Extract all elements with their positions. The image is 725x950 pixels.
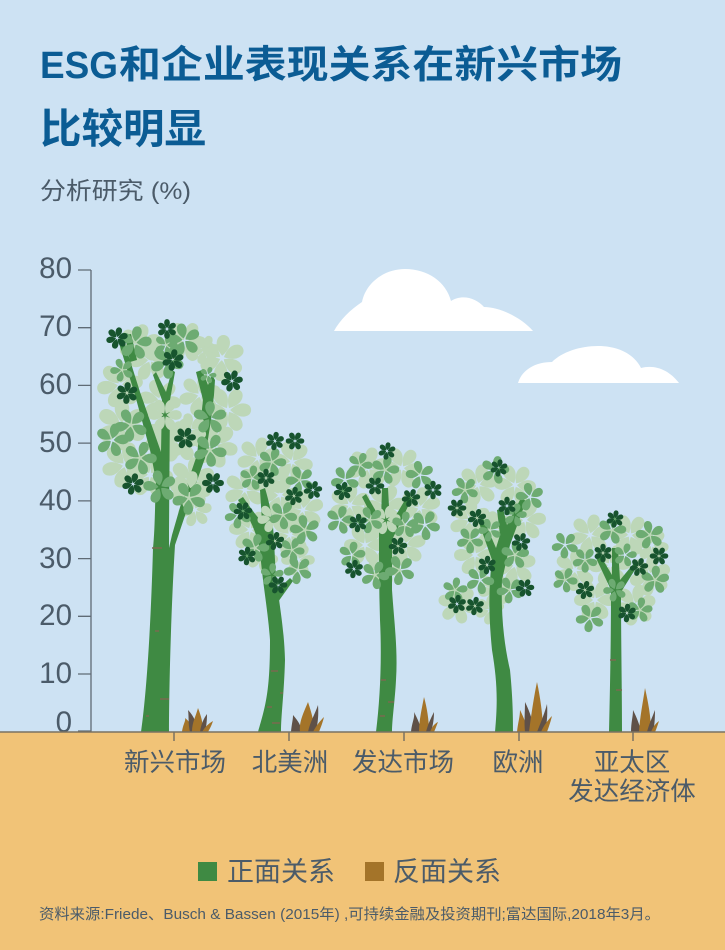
legend [198,857,501,887]
x axis labels: 新兴市场 [124,749,226,777]
x axis labels: 发达经济体 [568,778,696,806]
x axis labels: 欧洲 [492,749,544,777]
y axis: 50 [39,426,72,459]
x axis labels: 北美洲 [252,749,328,777]
cloud: large [334,269,533,331]
y axis: 80 [39,252,72,285]
title: ESG [40,45,118,87]
subtitle: 分析研究 (%) [40,178,191,205]
x axis labels: 亚太区 [594,749,670,777]
y axis: 30 [39,542,72,575]
y axis: 40 [39,484,72,517]
source note: 资料来源:Friede、Busch & Bassen (2015年) ,可持续金融及投资期刊;富达国际,2018年3月。 [39,905,660,923]
grass: developed markets [411,697,438,732]
y axis: 60 [39,368,72,401]
title [40,44,622,152]
x axis line and ticks [0,732,725,741]
tree: North America [219,428,328,732]
grass: emerging markets [182,708,213,732]
tree: developed markets [322,439,446,732]
x axis labels [124,749,696,806]
y axis: 10 [39,657,72,690]
legend: 正面关系 [227,857,335,887]
cloud: small [518,346,679,383]
grass: Europe [517,682,552,732]
y axis [39,252,91,739]
y axis: 20 [39,599,72,632]
legend: 反面关系 [393,857,501,887]
tree: Europe [430,452,553,732]
grass: developed Asia Pacific [631,688,659,732]
y axis: 70 [39,310,72,343]
tree: emerging markets [90,313,260,732]
tree: developed Asia Pacific [546,506,676,732]
title: 和企业表现关系在新兴市场 [119,44,622,87]
sky background [0,0,725,732]
grass: North America [291,702,324,732]
y axis: 0 [56,706,72,739]
ground [0,732,725,950]
x axis labels: 发达市场 [352,749,454,777]
title: 比较明显 [40,106,206,152]
